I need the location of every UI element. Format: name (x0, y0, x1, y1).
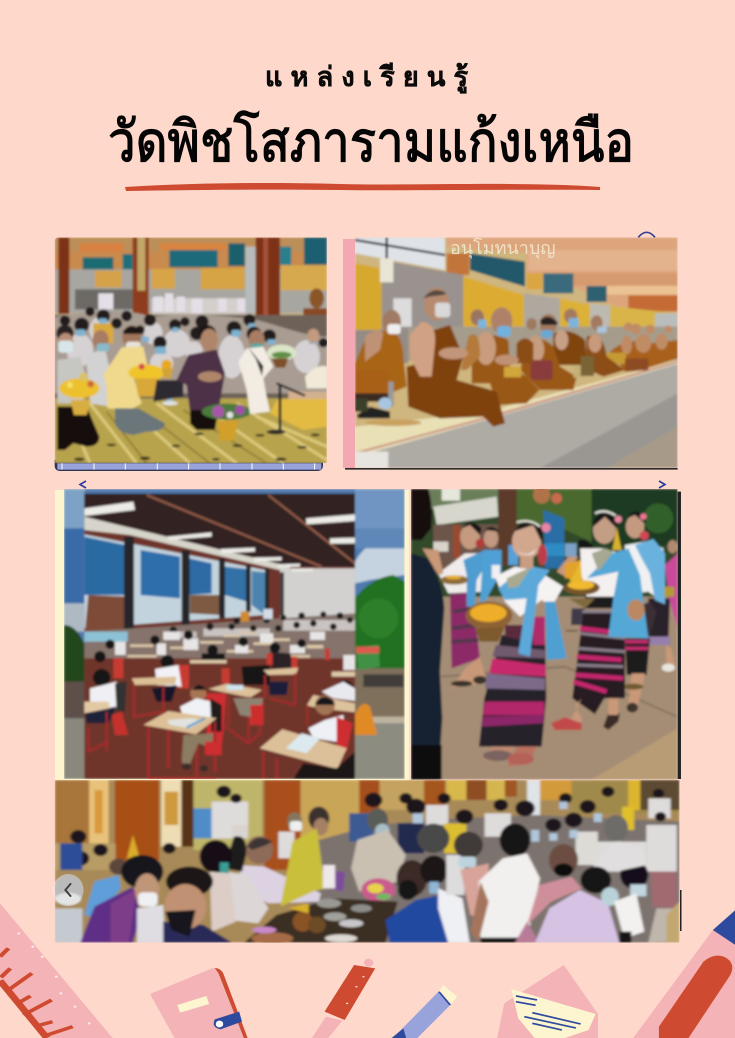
center boy (207, 693, 226, 755)
ground (441, 594, 670, 600)
right center dancer (572, 612, 625, 714)
icon: pencil case (633, 910, 735, 1038)
photo: monks chanting (345, 232, 678, 470)
people left (60, 843, 82, 870)
arrow left (80, 481, 86, 488)
white back man (420, 855, 448, 885)
photo: alms giving crowd (53, 780, 679, 944)
far right pink (668, 540, 678, 553)
far right dancer (648, 598, 670, 645)
blue shirt man (396, 860, 427, 897)
floor (55, 393, 327, 463)
cream strip behind photo 3 (55, 490, 409, 781)
gray haired man (246, 836, 273, 864)
arrow right (659, 481, 665, 488)
icon: envelope (497, 965, 598, 1038)
photo: ceremony with offerings (55, 237, 328, 471)
crowd mid rows (55, 315, 327, 398)
microphone (277, 384, 283, 432)
inner photo (84, 494, 355, 779)
icon: ruler (0, 903, 113, 1038)
right woman (620, 861, 648, 889)
lamps (84, 502, 355, 572)
front mask man (163, 922, 232, 943)
back person (578, 540, 593, 562)
student 2 (161, 655, 174, 668)
photo frame bar (55, 460, 323, 471)
background (55, 780, 91, 847)
second left dancer (484, 529, 498, 548)
carousel button (53, 874, 84, 906)
center-left monk (472, 335, 539, 405)
monks row (585, 335, 625, 377)
ceiling (447, 237, 678, 312)
desk 4 (263, 668, 298, 675)
crowd far (163, 620, 355, 638)
title: วัดพิชโสภารามแก้งเหนือ (108, 110, 634, 173)
yellow shirt man (308, 807, 329, 830)
white shirt man centre (500, 823, 530, 857)
pink strip behind photo 2 (343, 239, 355, 468)
table of bowls (244, 898, 398, 943)
title underline (125, 183, 600, 191)
dark person at left (411, 489, 432, 540)
purple shirt man (80, 887, 141, 943)
black hair woman (200, 840, 232, 873)
photo 5 dark right edge (680, 890, 682, 931)
photo: dancers with flower baskets (411, 486, 681, 780)
left front man (57, 357, 86, 403)
right side (338, 680, 354, 688)
yellow shirt man (122, 325, 141, 348)
icon: pencil (392, 985, 457, 1038)
left dancer (450, 592, 480, 668)
patterned shirt (367, 808, 388, 832)
yellow cloth table (270, 395, 327, 430)
stationery decorations (0, 903, 735, 1038)
photo: students taking exam (64, 489, 405, 779)
faint caption: อนุโมทนาบุญ (450, 237, 556, 259)
sky sides (76, 489, 405, 724)
student left (93, 669, 110, 686)
background greenery (411, 489, 678, 599)
gold/bright centre (361, 878, 395, 902)
desks mid (127, 632, 355, 677)
desk 3 (208, 684, 262, 698)
left monk (355, 330, 407, 393)
white jacket man (247, 327, 261, 341)
back row in white (98, 293, 245, 313)
big monk (424, 287, 449, 321)
windows (355, 237, 445, 270)
dark edge (678, 492, 681, 779)
icon: pen (312, 959, 375, 1038)
front dancer (479, 635, 546, 747)
purple man (199, 324, 217, 340)
lilac wrap (580, 867, 611, 893)
far monks (610, 340, 678, 372)
pink woman (549, 844, 578, 876)
chairs mid (113, 648, 330, 725)
bottom edge (345, 468, 678, 470)
wall panels (355, 263, 382, 330)
platform (374, 363, 678, 452)
crowd fill (301, 815, 679, 943)
dark arc decoration (638, 232, 655, 237)
subtitle: แหล่งเรียนรู้ (265, 62, 476, 94)
icon: notebook (150, 968, 248, 1038)
